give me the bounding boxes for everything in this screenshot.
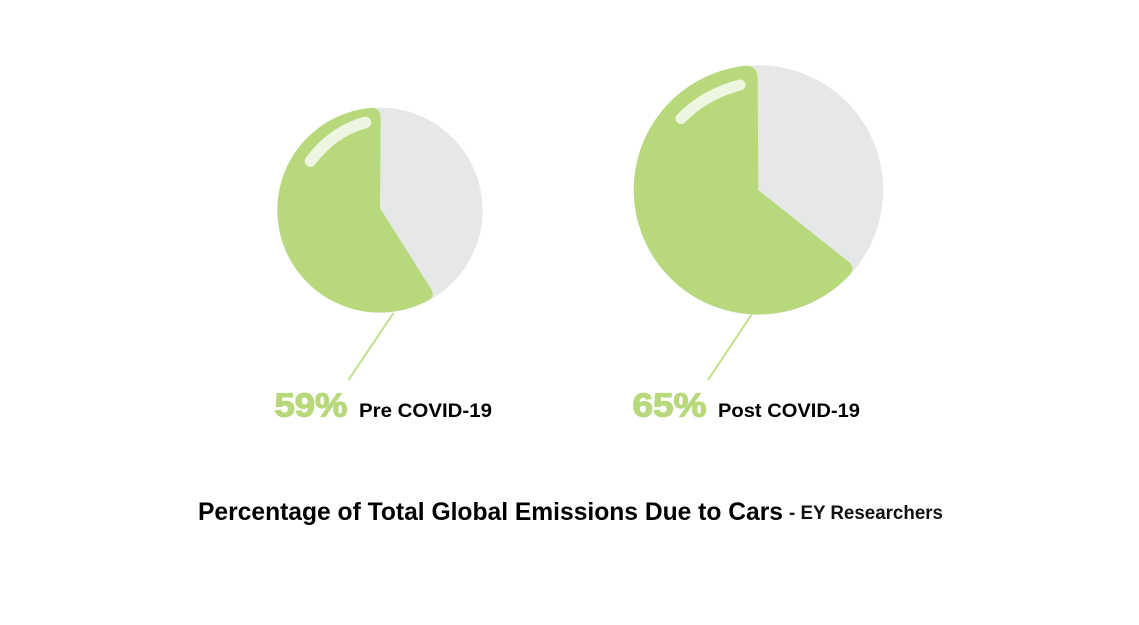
leader line: 59% [348, 313, 394, 380]
label: Post COVID-19: Post COVID-19 [718, 401, 860, 422]
slice highlight [681, 85, 740, 118]
label: Pre COVID-19: Pre COVID-19 [359, 401, 492, 422]
panel: post COVID-19 pie chart [634, 65, 883, 315]
panel: pre COVID-19 pie chart [277, 108, 483, 313]
pie slice: 59% [277, 108, 433, 313]
leader line: 65% [708, 314, 752, 380]
pie remainder: 35% [634, 65, 883, 315]
source: EY Researchers: - EY Researchers [789, 503, 943, 524]
title: Percentage of Total Global Emissions Due to Cars [198, 498, 783, 526]
slice highlight [310, 122, 366, 161]
pie remainder: 41% [277, 108, 483, 313]
label: 59%: 59% [274, 386, 348, 424]
pie slice: 65% [634, 66, 852, 314]
label: 65%: 65% [632, 386, 706, 424]
